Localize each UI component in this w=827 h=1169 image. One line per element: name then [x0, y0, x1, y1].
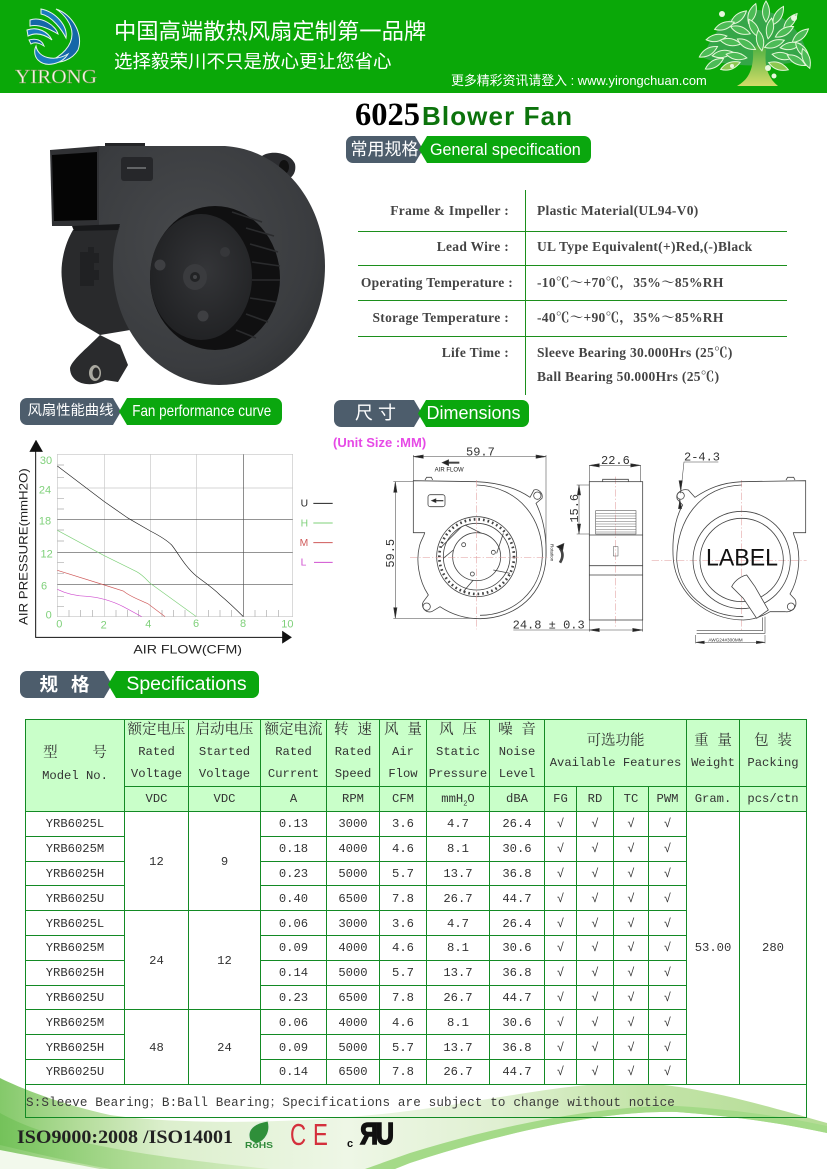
arrows and dimensions: side view: [513, 464, 643, 632]
CE mark: [290, 1117, 328, 1152]
table header: column names: √: [557, 1041, 564, 1055]
table header: column names: 6500: [338, 991, 368, 1005]
table header: column names: 26.7: [443, 991, 473, 1005]
table header: column names: Rated: [335, 745, 371, 759]
table header: column names: Started: [199, 745, 250, 759]
table header: column names: √: [627, 991, 635, 1005]
table header: column names: √: [591, 892, 599, 906]
legend: M: [300, 538, 308, 549]
table header: column names: Current: [268, 767, 319, 781]
table header: column names: √: [627, 892, 635, 906]
table header: column names: 8.1: [447, 842, 469, 856]
table header: column names: √: [557, 842, 564, 856]
table header: column names: 6500: [338, 892, 368, 906]
table header: column names: 24: [149, 954, 164, 968]
table row: 48V M: 4.6: [392, 1016, 414, 1030]
table header: column names: 12: [149, 855, 164, 869]
table header: column names: √: [627, 1065, 635, 1079]
x axis ticks: 2: [101, 620, 107, 632]
table header: column names: 0.23: [279, 991, 308, 1005]
table header: column names: Voltage: [199, 767, 250, 781]
CE mark: E: [313, 1117, 328, 1152]
dimension text: 22.6: 22.6: [601, 454, 630, 468]
curve U: [57, 466, 243, 617]
section badge: fan performance curve: [20, 398, 282, 425]
rear view: [673, 477, 806, 633]
table header: column names: 36.8: [502, 1041, 532, 1055]
spec: frame value: Plastic Material(UL94-V0): [537, 203, 699, 218]
table header: column names: Noise: [499, 745, 535, 759]
table row: 48V M: 4000: [338, 1016, 368, 1030]
curve L: [57, 589, 142, 617]
table row: 12V L: YRB6025L: [46, 817, 104, 831]
table header: column names: 30.6: [502, 842, 532, 856]
table header: column names: 额定电压: [128, 723, 186, 739]
table header: column names: YRB6025M: [46, 941, 104, 955]
y axis ticks: 12: [41, 548, 53, 560]
divider column: [525, 190, 526, 395]
arrows and dimensions: rear view: [678, 462, 765, 644]
x axis ticks: 4: [145, 619, 151, 631]
icon: RoHS leaf: [245, 1121, 273, 1150]
table header: column names: √: [627, 1041, 635, 1055]
table row: 48V M: √: [627, 1016, 635, 1030]
table header: units: RPM: [342, 792, 364, 806]
table header: column names: YRB6025U: [46, 1065, 104, 1079]
spec: frame label: Frame & Impeller :: [390, 203, 509, 218]
table row: 24V L: 3000: [338, 917, 368, 931]
y axis ticks: 30: [40, 455, 52, 467]
table header: column names: 53.00: [695, 941, 731, 955]
table header: units: FG: [553, 792, 568, 806]
chart axes: [30, 440, 292, 643]
table header: column names: 包 装: [754, 734, 792, 750]
table header: column names: 26.7: [443, 1065, 473, 1079]
table header: column names: √: [557, 941, 564, 955]
table header: column names: YRB6025H: [46, 1041, 104, 1055]
table header: column names: Speed: [335, 767, 371, 781]
UL mark: [347, 1116, 394, 1151]
x axis ticks: 10: [281, 619, 293, 631]
table footnote: S:Sleeve Bearing；B:Ball Bearing；Specifications are subject to change without notice: [26, 1096, 675, 1110]
table header: column names: 5000: [338, 1041, 368, 1055]
centre lines: [410, 477, 807, 630]
UL mark: U: [376, 1116, 394, 1151]
table header: column names: √: [591, 991, 599, 1005]
legend: U: [301, 499, 308, 510]
table header: column names: Available Features: [550, 756, 681, 770]
dimension text: 59.7: 59.7: [466, 446, 495, 460]
unit note: (Unit Size :MM): [333, 435, 426, 450]
table header: column names: 4000: [338, 842, 368, 856]
table header: column names: 9: [221, 855, 228, 869]
logo wordmark: YIRONG: [15, 66, 97, 88]
header banner: [0, 0, 827, 93]
y axis ticks: 0: [46, 609, 52, 621]
table header: column names: √: [557, 892, 564, 906]
table header: column names: 26.7: [443, 892, 473, 906]
table row: 24V L: √: [664, 917, 671, 931]
table row: 24V L: √: [627, 917, 635, 931]
table header: column names: 12: [217, 954, 232, 968]
table row: 48V M: 30.6: [502, 1016, 532, 1030]
table row: 24V L: 4.7: [447, 917, 469, 931]
table row: 24V L: YRB6025L: [46, 917, 104, 931]
table header: column names: √: [664, 1041, 671, 1055]
table row: 12V L: 3.6: [392, 817, 414, 831]
front view: [413, 477, 546, 619]
table row: 24V L: 26.4: [502, 917, 532, 931]
section badge: general specification: [346, 136, 591, 163]
table row: 48V M: √: [591, 1016, 599, 1030]
table header: column names: 4.6: [392, 941, 414, 955]
table row: 24V L: [46, 917, 671, 968]
table header: column names: 0.23: [279, 867, 308, 881]
icon: RoHS leaf: RoHS: [245, 1140, 273, 1150]
table header: column names: √: [664, 892, 671, 906]
table row: 48V M: [46, 1016, 671, 1055]
UL mark: c: [347, 1138, 353, 1150]
table header: column names: 5.7: [392, 966, 414, 980]
LABEL text: LABEL: [706, 545, 778, 572]
logo: YIRONG: [15, 8, 97, 88]
table header: column names: 转 速: [334, 723, 372, 739]
table header: column names: 风 量: [384, 723, 422, 739]
table header: column names: √: [627, 867, 635, 881]
table header: column names: √: [557, 966, 564, 980]
table header: units: pcs/ctn: [747, 792, 799, 806]
x axis ticks: 8: [240, 618, 246, 630]
table header: column names: √: [664, 966, 671, 980]
table row: 12V L: 3000: [338, 817, 368, 831]
table header: column names: √: [557, 1065, 564, 1079]
headline: 中国高端散热风扇定制第一品牌: [114, 19, 426, 44]
table header: column names: 5.7: [392, 867, 414, 881]
dimension text: 2-4.3: 2-4.3: [684, 451, 720, 465]
table header: column names: 0.40: [279, 892, 308, 906]
legend: [300, 499, 333, 569]
table row: 12V L: [46, 817, 784, 955]
table header: column names: 5000: [338, 867, 368, 881]
table row: 24V L: 0.06: [279, 917, 308, 931]
spec: operating temperature value: -10℃～+70℃，35%～85%RH: [537, 275, 724, 290]
section badge: dimensions: [334, 400, 529, 427]
table header: column names: 可选功能: [587, 734, 645, 750]
y axis ticks: 6: [41, 580, 47, 592]
spec: lead wire value: UL Type Equivalent(+)Red,(-)Black: [537, 239, 752, 254]
table header: column names: Flow: [388, 767, 418, 781]
table header: column names: YRB6025M: [46, 842, 104, 856]
table header: column names: √: [627, 842, 635, 856]
table header: units: A: [290, 792, 297, 806]
spec: lead wire label: Lead Wire :: [437, 239, 509, 254]
table header: column names: √: [664, 867, 671, 881]
table header: units: VDC: [146, 792, 167, 806]
curve H: [57, 530, 196, 617]
table header: column names: 13.7: [443, 867, 473, 881]
dimension text: 59.5: 59.5: [384, 539, 398, 568]
table header: column names: Pressure: [429, 767, 487, 781]
table header: column names: Level: [499, 767, 535, 781]
table row: 48V M: 0.06: [279, 1016, 308, 1030]
table header: column names: 0.14: [279, 1065, 308, 1079]
background: green wave at page bottom: [0, 1078, 827, 1169]
table header: units: TC: [624, 792, 638, 806]
table header: column names: Weight: [691, 756, 735, 770]
side view: [589, 479, 643, 620]
table row: 12V L: 26.4: [502, 817, 532, 831]
spec: storage temperature value: -40℃～+90℃，35%～85%RH: [537, 310, 724, 325]
table row: 48V M: YRB6025M: [46, 1016, 104, 1030]
table header: column names: 7.8: [392, 991, 414, 1005]
section badge: dimensions: Dimensions: [426, 403, 521, 423]
table header: units: mmH2O: [441, 792, 475, 808]
table header: column names: YRB6025H: [46, 966, 104, 980]
table header: column names: √: [591, 1041, 599, 1055]
table header: column names: 30.6: [502, 941, 532, 955]
table header: units: Gram.: [695, 792, 731, 806]
table header: units: VDC: [214, 792, 235, 806]
table header: column names: Air: [392, 745, 414, 759]
table header: column names: √: [627, 941, 635, 955]
table header: column names: Voltage: [131, 767, 182, 781]
table row: 12V L: 0.13: [279, 817, 308, 831]
table row: 12V L: √: [557, 817, 564, 831]
table row: 12V L: √: [627, 817, 635, 831]
table header: units: CFM: [392, 792, 414, 806]
y axis ticks: 24: [39, 484, 51, 496]
table header: column names: 0.14: [279, 966, 308, 980]
ISO text: ISO9000:2008 /ISO14001: [17, 1128, 233, 1148]
table header: column names: 5000: [338, 966, 368, 980]
dimension drawings: [384, 446, 807, 644]
y axis title: AIR PRESSURE(mmH2O): [16, 468, 30, 625]
section badge: fan performance curve: Fan performance curve: [132, 403, 271, 420]
section badge: specifications: [20, 671, 259, 698]
table header: column names: 13.7: [443, 966, 473, 980]
table header: column names: YRB6025H: [46, 867, 104, 881]
x axis ticks: 0: [56, 619, 62, 631]
table header: units: PWM: [657, 792, 678, 806]
table header: column names: 5.7: [392, 1041, 414, 1055]
table header: column names: Static: [436, 745, 480, 759]
table header: column names: √: [664, 842, 671, 856]
table header: column names: 7.8: [392, 1065, 414, 1079]
section badge: fan performance curve: 风扇性能曲线: [28, 403, 113, 419]
label: air flow: AIR FLOW: [435, 467, 464, 473]
table header: column names: 36.8: [502, 867, 532, 881]
table header: column names: 44.7: [502, 991, 532, 1005]
table header: column names: √: [591, 842, 599, 856]
x axis ticks: 6: [193, 618, 199, 630]
table header: column names: Rated: [138, 745, 175, 759]
wire length text: AWG24#300MM: [708, 638, 743, 643]
table row: 12V L: 4.7: [447, 817, 469, 831]
x axis ticks: [56, 618, 293, 632]
table header: column names: 0.09: [279, 1041, 308, 1055]
table header: column names: 启动电压: [196, 723, 254, 739]
table header: column names: √: [591, 941, 599, 955]
table header: column names: √: [557, 991, 564, 1005]
UL mark: R: [360, 1116, 378, 1151]
table header: column names: YRB6025U: [46, 892, 104, 906]
table header: column names: 48: [149, 1041, 164, 1055]
table header: column names: √: [591, 966, 599, 980]
table header: column names: √: [557, 867, 564, 881]
table header: column names: √: [591, 1065, 599, 1079]
table header: column names: √: [664, 941, 671, 955]
spec: life time value: [537, 345, 733, 384]
table header: units: dBA: [506, 792, 528, 806]
table header: column names: 8.1: [447, 941, 469, 955]
table header: column names: Packing: [747, 756, 799, 770]
CE mark: C: [290, 1117, 306, 1152]
x axis title: AIR FLOW(CFM): [133, 642, 242, 656]
table header: column names: √: [664, 1065, 671, 1079]
table header: column names: 24: [217, 1041, 232, 1055]
certification strip: [17, 1116, 394, 1152]
title: 6025Blower Fan: [355, 97, 573, 133]
table header: column names: 额定电流: [264, 723, 322, 739]
y axis ticks: [39, 455, 53, 621]
table header: column names: 13.7: [443, 1041, 473, 1055]
label: rotation: Rotation: [550, 544, 555, 562]
table header: column names: 44.7: [502, 892, 532, 906]
table row: 48V M: √: [664, 1016, 671, 1030]
table header: column names: 44.7: [502, 1065, 532, 1079]
table header: column names: 6500: [338, 1065, 368, 1079]
section badge: specifications: 规格: [39, 674, 102, 695]
spec: operating temperature label: Operating Temperature :: [361, 275, 513, 290]
spec: life time value: Sleeve Bearing 30.000Hrs (25℃): [537, 345, 733, 360]
table row: 12V L: √: [664, 817, 671, 831]
line chart: fan performance curve: [16, 440, 333, 656]
table header: units: [125, 787, 806, 811]
website line: 更多精彩资讯请登入 : www.yirongchuan.com: [451, 73, 707, 88]
y axis ticks: 18: [39, 515, 51, 527]
table row: 24V L: 3.6: [392, 917, 414, 931]
table header: column names: 噪 音: [498, 723, 536, 739]
legend: H: [301, 518, 308, 529]
table header: column names: Model No.: [42, 768, 108, 782]
table header: column names: 280: [762, 941, 784, 955]
sub headline: 选择毅荣川不只是放心更让您省心: [114, 51, 392, 72]
specifications table: [25, 719, 807, 1118]
table row: 48V M: √: [557, 1016, 564, 1030]
curve M: [57, 570, 165, 617]
section badge: dimensions: 尺寸: [355, 403, 401, 423]
dimension text: 15.6: 15.6: [568, 494, 582, 523]
table header: column names: YRB6025U: [46, 991, 104, 1005]
table row: 48V M: 8.1: [447, 1016, 469, 1030]
table row: 12V L: √: [591, 817, 599, 831]
table header: column names: 36.8: [502, 966, 532, 980]
table header: units: RD: [588, 792, 602, 806]
section badge: general specification: 常用规格: [350, 140, 418, 159]
table header: column names: 4.6: [392, 842, 414, 856]
table header: column names: Rated: [275, 745, 312, 759]
table row: 24V L: √: [591, 917, 599, 931]
table header: column names: √: [664, 991, 671, 1005]
table header: column names: 重 量: [694, 734, 732, 750]
section badge: general specification: General specification: [430, 140, 580, 159]
table header: column names: √: [627, 966, 635, 980]
specification list: [358, 190, 787, 395]
table row: 24V L: √: [557, 917, 564, 931]
table header: column names: 4000: [338, 941, 368, 955]
dimension text: 24.8: 24.8 ± 0.3: [513, 619, 585, 633]
section badge: specifications: Specifications: [126, 673, 247, 695]
product photo: blower fan: [50, 143, 325, 385]
table header: column names: 0.09: [279, 941, 308, 955]
legend: L: [301, 558, 307, 569]
table header: column names: 风 压: [439, 723, 477, 739]
table header: column names: 型 号: [43, 746, 107, 762]
icon: tree: [698, 0, 811, 86]
arrows and dimensions: front view: [393, 455, 564, 618]
spec: life time label: Life Time :: [442, 345, 509, 360]
table header: column names: √: [591, 867, 599, 881]
table header: column names: [26, 720, 806, 1110]
spec: life time value: Ball Bearing 50.000Hrs (25℃): [537, 369, 719, 384]
table header: column names: 0.18: [279, 842, 308, 856]
table header: column names: 7.8: [392, 892, 414, 906]
spec: storage temperature label: Storage Temperature :: [372, 310, 509, 325]
